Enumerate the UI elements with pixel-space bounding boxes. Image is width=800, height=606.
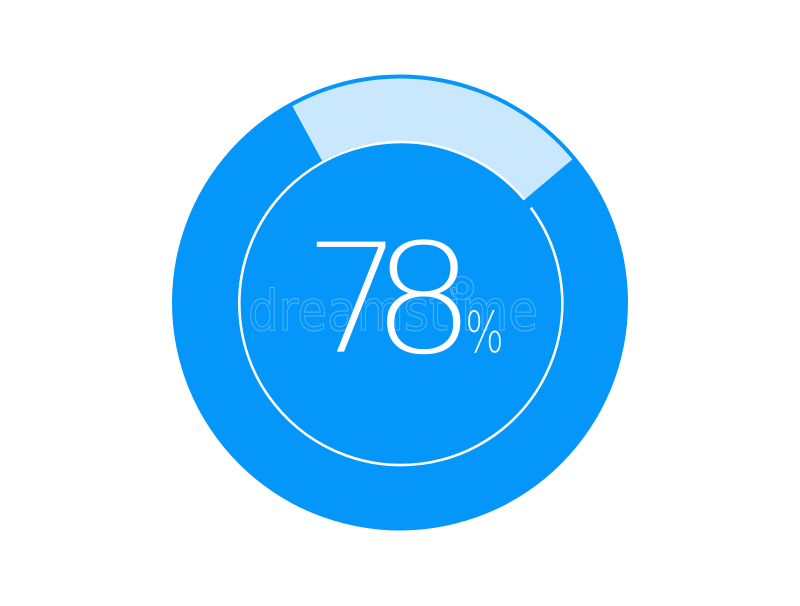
digit 8: 8 <box>371 211 477 389</box>
watermark word: dreamstime <box>248 279 538 344</box>
blue outer disc <box>172 74 628 530</box>
percent sign: % <box>465 300 504 366</box>
inner white ring <box>239 142 562 465</box>
digit 7: 7 <box>304 212 403 388</box>
watermark <box>248 276 538 344</box>
remaining 22 percent light segment <box>292 79 572 200</box>
percentage value <box>304 211 504 389</box>
watermark spiral logo <box>450 276 474 300</box>
